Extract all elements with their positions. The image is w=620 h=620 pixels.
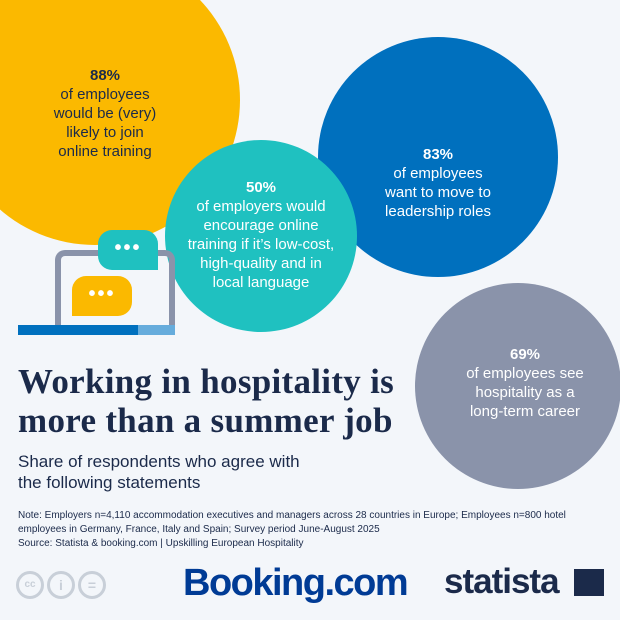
icon: laptop with chat bubbles	[18, 230, 175, 335]
logo: Booking.com: Booking.com	[183, 562, 407, 604]
note and source	[18, 510, 566, 549]
circle: 69%	[415, 283, 620, 489]
text: 50%: 50%	[246, 179, 276, 196]
text: 50%: high-quality and in	[200, 255, 322, 272]
circle: 50%	[165, 140, 357, 332]
icon: cc license: i	[59, 577, 63, 593]
note and source: Note: Employers n=4,110 accommodation executives and managers across 28 countries in Europe; Employees n=800 hotel	[18, 510, 566, 521]
note and source: Source: Statista & booking.com | Upskilling European Hospitality	[18, 538, 304, 549]
circle: 88% employees	[0, 0, 240, 245]
text: 69%	[466, 346, 584, 420]
subtitle: Share of respondents who agree with	[18, 452, 300, 471]
text: 69%: 69%	[510, 346, 540, 363]
icon: cc license	[16, 571, 106, 599]
text: 83%: 83%	[423, 146, 453, 163]
text: 50%	[188, 179, 334, 291]
text: 69%: long-term career	[470, 403, 580, 420]
icon: laptop with chat bubbles: •••	[114, 237, 142, 259]
text: 83%	[385, 146, 491, 220]
text: 83%: of employees	[393, 165, 483, 182]
text: 50%: local language	[213, 274, 309, 291]
text: 69%: of employees see	[466, 365, 584, 382]
text: 88%	[54, 67, 156, 160]
text: 88%: online training	[58, 143, 152, 160]
text: 50%: encourage online	[203, 217, 319, 234]
subtitle: the following statements	[18, 473, 200, 492]
logo: statista: statista	[444, 562, 559, 601]
text: 88%: of employees	[60, 86, 150, 103]
text: 88%: likely to join	[66, 124, 144, 141]
title	[18, 362, 394, 440]
note and source: employees in Germany, France, Italy and Spain; Survey period June-August 2025	[18, 524, 380, 535]
icon: laptop with chat bubbles: •••	[88, 283, 116, 305]
title: Working in hospitality is	[18, 362, 394, 401]
text: 88%: would be (very)	[54, 105, 156, 122]
text: 50%: training if it’s low-cost,	[188, 236, 334, 253]
text: 69%: hospitality as a	[475, 384, 575, 401]
text: 88%: 88%	[90, 67, 120, 84]
text: 83%: want to move to	[385, 184, 491, 201]
icon: cc license: cc	[24, 579, 36, 590]
circle: 83%	[318, 37, 558, 277]
text: 50%: of employers would	[196, 198, 326, 215]
icon: cc license: =	[88, 577, 96, 593]
title: more than a summer job	[18, 401, 393, 440]
subtitle	[18, 452, 300, 492]
text: 83%: leadership roles	[385, 203, 491, 220]
